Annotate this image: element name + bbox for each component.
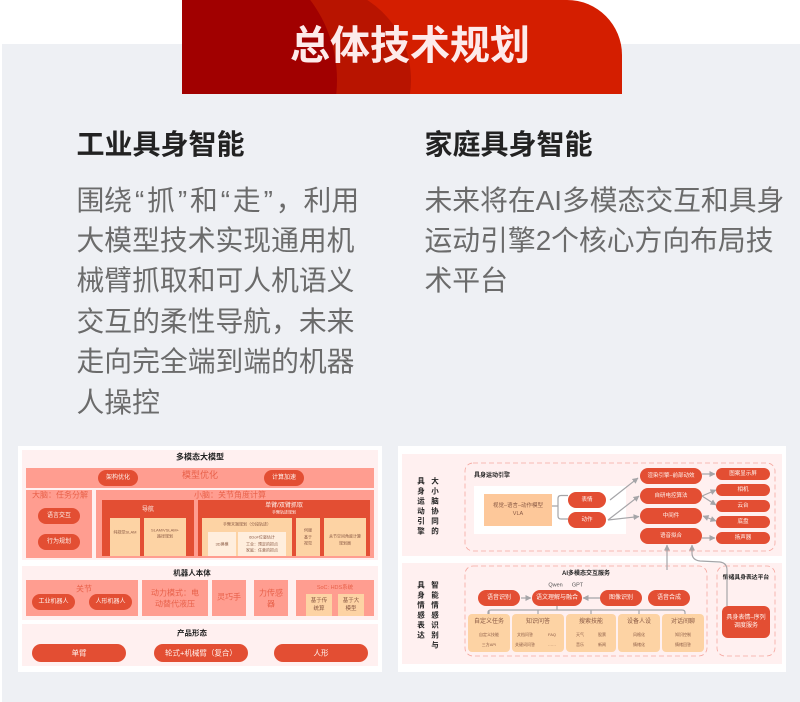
section: robot body: 统算 [313, 604, 325, 612]
section: robot body: 基于传 [311, 596, 328, 604]
section: embodied emotion expression: 对话间聊 [671, 617, 695, 625]
section: embodied emotion expression: Qwen [548, 582, 563, 588]
section: robot body: 关节 [76, 584, 92, 594]
section: multimodal model: 纯视觉SLAM [114, 528, 136, 534]
text: home description: 未来将在AI多模态交互和具身 [424, 184, 784, 216]
section: embodied emotion expression: 语文理解与融合 [536, 593, 578, 601]
section: embodied emotion expression: 达 [417, 630, 425, 640]
section: embodied emotion expression: 具身表情–序列 [726, 613, 766, 621]
section: embodied motion engine: 同 [431, 516, 439, 526]
section: embodied emotion expression: 识 [431, 620, 439, 630]
section: multimodal model: 关节空间角度计算 [329, 532, 361, 538]
section: embodied emotion expression: 语音识别 [487, 593, 511, 601]
section: embodied emotion expression: 身 [417, 590, 425, 600]
section: product forms [22, 624, 378, 666]
title banner [182, 0, 622, 94]
section: embodied motion engine: 语音拟合 [660, 531, 682, 539]
section: embodied motion engine: 渲染引擎–前部动效 [647, 471, 695, 479]
section: embodied emotion expression: 风格化 [633, 631, 645, 637]
section: multimodal model: 规划器 [339, 540, 351, 546]
section: embodied emotion expression: 情绪具身表达平台 [723, 573, 769, 581]
section: embodied emotion expression: 表 [417, 620, 425, 630]
section: robot body: 工业机器人 [38, 597, 69, 605]
section: robot body: 动力模式：电 [151, 588, 199, 598]
section: product forms: 产品形态 [177, 628, 207, 638]
section: embodied emotion expression: 股票 [598, 631, 606, 637]
text: industrial description: 大模型技术实现通用机 [76, 225, 354, 256]
section: product forms: 单臂 [72, 648, 87, 658]
section: product forms: 人形 [314, 648, 329, 658]
section: embodied emotion expression: 新闻 [598, 641, 606, 647]
section: robot body: 灵巧手 [217, 592, 241, 602]
section: embodied emotion expression: 情绪化 [633, 641, 645, 647]
section: multimodal model: 语言交互 [47, 511, 71, 519]
section: embodied emotion expression: 感 [417, 610, 425, 620]
section: embodied emotion expression: 调度服务 [734, 621, 758, 629]
section: embodied emotion expression: 与 [431, 640, 439, 650]
section: robot body: 基于大 [343, 596, 360, 604]
section: multimodal model: 多模态大模型 [176, 452, 224, 462]
section: embodied motion engine: 动 [417, 506, 425, 516]
section: embodied emotion expression: 语音合成 [657, 593, 681, 601]
title banner: 总体技术规划 [290, 24, 530, 68]
section: multimodal model: 导航 [142, 505, 154, 513]
section: embodied motion engine: 扬声器 [735, 533, 752, 541]
section: embodied motion engine: 表情 [581, 495, 593, 503]
section: multimodal model: 单臂/双臂抓取 [265, 501, 303, 509]
section: embodied emotion expression: AI多模态交互服务 [562, 569, 610, 577]
section: embodied motion engine: 大 [431, 476, 439, 486]
section: embodied motion engine: 相机 [737, 485, 749, 493]
section: embodied emotion expression: 设备人设 [627, 617, 651, 625]
section: embodied motion engine: 小 [431, 486, 439, 496]
section: embodied emotion expression: 三方API [482, 641, 496, 647]
section: embodied emotion expression: 能 [431, 590, 439, 600]
text: home description: 运动引擎2个核心方向布局技 [424, 225, 774, 256]
section: embodied motion engine: 擎 [417, 526, 425, 536]
section: embodied emotion expression: FAQ [548, 632, 556, 637]
section: multimodal model: 家庭：任意的抓点 [246, 546, 278, 552]
section: robot body: 机器人本体 [173, 568, 211, 578]
section: multimodal model: 视觉 [304, 540, 312, 546]
text: industrial description: 走向完全端到端的机器 [76, 346, 354, 377]
section: embodied emotion expression [402, 545, 782, 664]
section: product forms: 轮式+机械臂（复合） [165, 648, 237, 658]
section: multimodal model: 基于 [304, 534, 312, 540]
panel: left architecture diagram [18, 446, 382, 672]
section: embodied emotion expression: 图像识别 [609, 593, 633, 601]
section: embodied motion engine: 引 [417, 516, 425, 526]
text: industrial description: 交互的柔性导航，未来 [76, 306, 354, 337]
heading: home: 家庭具身智能 [424, 129, 593, 160]
section: multimodal model: 手臂轨迹规划 [272, 508, 296, 514]
section: embodied emotion expression: 搜索技能 [579, 617, 603, 625]
section: embodied motion engine: 具身运动引擎 [474, 471, 510, 479]
section: embodied motion engine: 图案显示屏 [729, 469, 757, 477]
section: multimodal model: 工业：预定的抓点 [246, 540, 278, 546]
section: embodied motion engine: 视觉–语言–动作模型 [493, 501, 544, 509]
section: multimodal model: 小脑：关节角度计算 [194, 490, 266, 500]
connectors: services [488, 545, 727, 614]
panel: right architecture diagram [398, 446, 786, 672]
section: robot body: 人形机器人 [95, 597, 126, 605]
text: home description [424, 184, 784, 296]
section: embodied motion engine: VLA [513, 511, 524, 517]
text: home description: 术平台 [424, 265, 508, 296]
section: embodied motion engine: 身 [417, 486, 425, 496]
text: industrial description: 人操控 [76, 387, 160, 418]
section: embodied emotion expression: 具 [417, 580, 425, 590]
section: robot body: 力传感 [259, 588, 283, 598]
text: industrial description: 围绕“抓”和“走”，利用 [76, 184, 359, 216]
section: multimodal model: 3D建模 [215, 540, 229, 546]
section: multimodal model: 伺服 [304, 526, 312, 532]
section: multimodal model: 计算加速 [272, 473, 296, 481]
section: embodied emotion expression: 天气 [576, 631, 584, 637]
section: robot body: 动替代液压 [155, 598, 195, 608]
section: embodied emotion expression: 情 [417, 600, 425, 610]
section: robot body: 器 [267, 600, 275, 608]
section: multimodal model: 手臂末端规划（分段轨迹） [223, 520, 271, 526]
section: embodied emotion expression: 智 [431, 580, 439, 590]
text: industrial description [76, 184, 359, 418]
section: multimodal model: SLAM/VSLAM+ [151, 528, 180, 532]
section: embodied motion engine: 云台 [737, 501, 749, 509]
section: embodied emotion expression: 别 [431, 630, 439, 640]
section: robot body [22, 566, 378, 620]
arrows: motion engine [608, 474, 716, 538]
section: embodied motion engine: 运 [417, 496, 425, 506]
section: embodied emotion expression: 情 [431, 600, 439, 610]
section: embodied motion engine: 动作 [581, 515, 593, 523]
section: embodied motion engine: 协 [431, 506, 439, 516]
section: embodied emotion expression: 情绪回答 [675, 641, 691, 647]
heading: industrial: 工业具身智能 [76, 129, 245, 160]
section: multimodal model: 行为规划 [47, 537, 71, 545]
section: embodied motion engine: 的 [431, 526, 439, 536]
section: embodied emotion expression: GPT [572, 582, 584, 588]
text: industrial description: 械臂抓取和可人机语义 [76, 265, 354, 296]
section: embodied emotion expression: 自定义技能 [479, 631, 499, 637]
section: embodied emotion expression: 关键词问答 [515, 641, 535, 647]
section: embodied emotion expression: 知识控制 [675, 631, 691, 637]
section: embodied emotion expression: 音乐 [576, 641, 584, 647]
section: embodied motion engine: 中间件 [663, 511, 680, 519]
section: embodied emotion expression: 文档问答 [517, 631, 533, 637]
section: multimodal model [22, 450, 378, 560]
section: robot body: 模型 [345, 604, 357, 612]
section: embodied motion engine [402, 454, 782, 556]
section: multimodal model: 架构优化 [106, 473, 130, 481]
section: embodied emotion expression: 知识问答 [526, 617, 550, 625]
section: embodied emotion expression: 感 [431, 610, 439, 620]
section: embodied motion engine: 脑 [431, 496, 439, 506]
section: multimodal model: 大脑：任务分解 [32, 490, 88, 500]
section: embodied motion engine: 具 [417, 476, 425, 486]
section: embodied motion engine: 底盘 [737, 517, 749, 525]
section: multimodal model: 路径规划 [157, 532, 173, 538]
section: embodied emotion expression: 自定义任务 [474, 617, 504, 625]
section: embodied emotion expression: …… [548, 642, 556, 647]
section: robot body: SoC: HDS系统 [317, 583, 354, 591]
section: multimodal model: 6DoF位姿估计 [249, 534, 275, 540]
section: multimodal model: 模型优化 [182, 469, 218, 480]
section: embodied motion engine: 自研电控算法 [654, 491, 688, 499]
